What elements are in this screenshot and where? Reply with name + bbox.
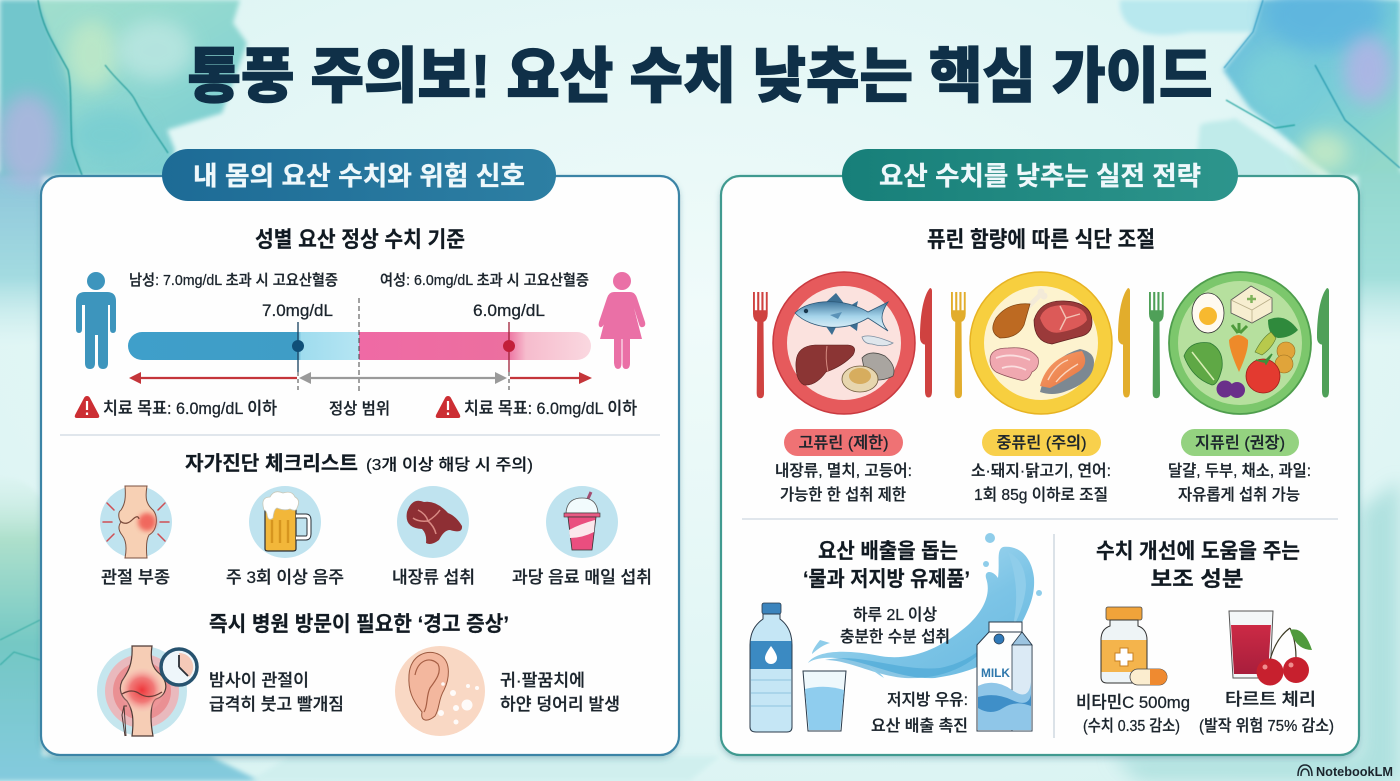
label: drinking 3+ per week: 주 3회 이상 음주	[226, 568, 344, 587]
tomato	[1246, 354, 1280, 393]
icon: water glass	[803, 671, 846, 731]
label: high purine: 고퓨린 (제한)	[798, 434, 888, 452]
warning: treatment goal right: 치료 목표: 6.0mg/dL 이하	[464, 399, 637, 418]
label: normal range: 정상 범위	[329, 400, 390, 418]
icon: milk carton	[977, 622, 1032, 731]
text: daily water: 하루 2L 이상	[853, 606, 937, 624]
plate: low purine	[1149, 272, 1329, 414]
panel: practical strategies	[721, 149, 1359, 755]
label: medium purine: 중퓨린 (주의)	[996, 434, 1086, 452]
greens	[1255, 318, 1298, 355]
text: daily water: 충분한 수분 섭취	[840, 628, 950, 646]
panel heading: right	[842, 149, 1238, 201]
egg	[1192, 293, 1224, 333]
text: tart cherry: 타르트 체리	[1225, 690, 1316, 709]
icon: vitamin bottle and capsule	[1101, 607, 1167, 685]
heading: diet by purine content: 퓨린 함량에 따른 식단 조절	[927, 227, 1155, 252]
carrot	[1229, 323, 1248, 372]
label: medium purine	[982, 429, 1101, 456]
text: knee symptom: 급격히 붓고 빨개짐	[209, 695, 344, 714]
icon: sugary drink	[546, 486, 618, 558]
panel heading: left: 내 몸의 요산 수치와 위험 신호	[193, 161, 525, 191]
heading: self checklist: (3개 이상 해당 시 주의)	[366, 456, 533, 474]
drumstick	[993, 288, 1048, 338]
anchovy	[862, 336, 893, 346]
plate: high purine	[753, 272, 932, 414]
tofu	[1231, 286, 1272, 323]
text: knee symptom: 밤사이 관절이	[209, 671, 309, 690]
heading: water and low-fat dairy: 요산 배출을 돕는	[818, 540, 958, 563]
icon: inflamed knee with clock	[97, 646, 197, 736]
label: daily sugary drinks: 과당 음료 매일 섭취	[512, 568, 652, 587]
potato	[1275, 342, 1295, 373]
liver	[796, 345, 855, 385]
text: low-fat milk: 요산 배출 촉진	[871, 717, 968, 735]
panel heading: left	[162, 149, 556, 201]
text: high purine foods: 가능한 한 섭취 제한	[780, 486, 906, 504]
illustration: water splash	[808, 533, 1042, 678]
text: tophi symptom: 귀·팔꿈치에	[500, 671, 585, 690]
text: vitamin C: (수치 0.35 감소)	[1083, 717, 1180, 735]
heading: supplements: 수치 개선에 도움을 주는	[1096, 540, 1300, 563]
icon: female figure	[599, 272, 645, 369]
label: organ meat intake: 내장류 섭취	[392, 568, 475, 587]
icon: ear with tophi	[395, 646, 485, 736]
lettuce	[1184, 343, 1222, 385]
arrows: treatment and normal ranges	[129, 372, 592, 384]
text: medium purine foods: 1회 85g 이하로 조질	[974, 486, 1108, 504]
label: joint swelling: 관절 부종	[101, 568, 170, 587]
value: female 6.0: 6.0mg/dL	[473, 301, 545, 320]
text: low purine foods: 자유롭게 섭취 가능	[1178, 486, 1300, 504]
heading: supplements: 보조 성분	[1150, 568, 1244, 591]
warning: treatment goal left: 치료 목표: 6.0mg/dL 이하	[103, 399, 277, 418]
logo: NotebookLM: NotebookLM	[1316, 764, 1393, 779]
plums	[1216, 380, 1245, 398]
male threshold label: 남성: 7.0mg/dL 초과 시 고요산혈증	[129, 272, 338, 289]
text: low-fat milk: 저지방 우유:	[887, 691, 968, 709]
panel heading: right: 요산 수치를 낮추는 실전 전략	[879, 161, 1201, 191]
icon: beer mug	[249, 486, 321, 558]
heading: self checklist: 자가진단 체크리스트	[185, 452, 358, 475]
heading: normal values by sex: 성별 요산 정상 수치 기준	[255, 227, 465, 252]
icon: male figure	[76, 272, 116, 369]
heading: water and low-fat dairy: ‘물과 저지방 유제품’	[803, 568, 970, 591]
icon: organ meat	[397, 486, 469, 558]
title: 통풍 주의보! 요산 수치 낮추는 핵심 가이드	[188, 43, 1212, 110]
icon: milk carton: MILK	[981, 668, 1011, 680]
heading: warning symptoms: 즉시 병원 방문이 필요한 ‘경고 증상’	[209, 613, 509, 636]
icon: water bottle	[750, 603, 792, 732]
panel: uric acid levels and warning signs	[41, 149, 679, 755]
fish	[795, 293, 888, 335]
plate: medium purine	[951, 272, 1130, 414]
value: male 7.0: 7.0mg/dL	[262, 301, 333, 320]
uric acid range bar	[128, 298, 591, 392]
label: low purine	[1181, 429, 1299, 456]
text: tart cherry: (발작 위험 75% 감소)	[1199, 717, 1334, 735]
icon: swollen joint	[100, 486, 172, 558]
pork	[990, 348, 1038, 380]
label: high purine	[784, 429, 903, 456]
text: low purine foods: 달걀, 두부, 채소, 과일:	[1168, 462, 1311, 480]
clam	[842, 353, 894, 392]
text: vitamin C: 비타민C 500mg	[1076, 693, 1190, 712]
salmon	[1040, 349, 1094, 394]
label: low purine: 지퓨린 (권장)	[1195, 434, 1285, 452]
female threshold label: 여성: 6.0mg/dL 초과 시 고요산혈증	[380, 272, 589, 289]
text: high purine foods: 내장류, 멸치, 고등어:	[775, 462, 912, 480]
text: tophi symptom: 하얀 덩어리 발생	[500, 695, 620, 714]
text: medium purine foods: 소·돼지·닭고기, 연어:	[971, 462, 1111, 480]
icon: tart cherry juice	[1229, 611, 1312, 686]
steak	[1034, 301, 1092, 344]
